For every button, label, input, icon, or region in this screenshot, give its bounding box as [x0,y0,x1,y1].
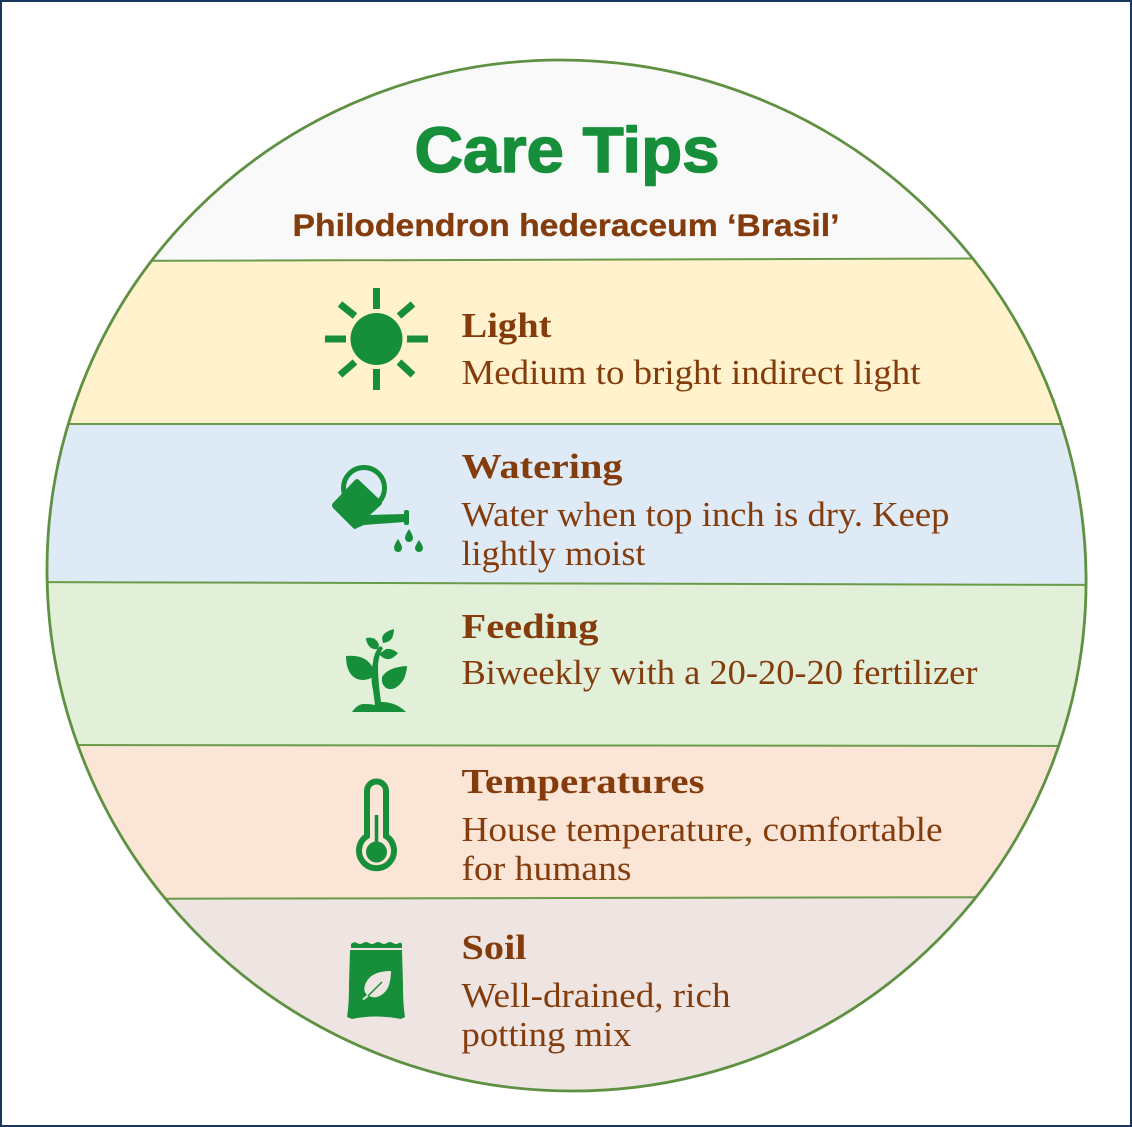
soil text [462,928,731,1054]
temperatures text: for humans [462,849,632,888]
circle with coloured bands [48,258,1085,1090]
watering text [462,447,950,573]
feeding text [462,607,978,692]
subtitle: Philodendron hederaceum ‘Brasil’ [292,207,840,243]
band: light [70,260,1060,423]
icon: thermometer [359,782,394,868]
watering description: Water when top inch is dry. Keep [462,495,950,534]
title: Care Tips [414,114,720,186]
soil text: potting mix [462,1015,632,1054]
watering text: lightly moist [462,534,646,573]
band: feeding [0,582,1132,746]
icon: watering can [332,468,423,552]
band: soil [168,898,974,1090]
temperatures text [462,762,942,888]
icon: soil bag [347,942,405,1019]
temperatures description: House temperature, comfortable [462,810,942,849]
icon: sun [325,288,428,390]
light text [462,306,921,392]
icon: plant [346,629,407,712]
band: title background [0,0,1132,261]
light heading: Light [462,306,552,345]
watering heading: Watering [462,447,623,486]
feeding heading: Feeding [462,607,599,646]
soil description: Well-drained, rich [462,976,731,1015]
band: watering [0,424,1132,585]
feeding description: Biweekly with a 20-20-20 fertilizer [462,653,978,692]
soil heading: Soil [462,928,527,967]
light description: Medium to bright indirect light [462,353,921,392]
temperatures heading: Temperatures [462,762,704,801]
band: temperatures [80,746,1057,898]
